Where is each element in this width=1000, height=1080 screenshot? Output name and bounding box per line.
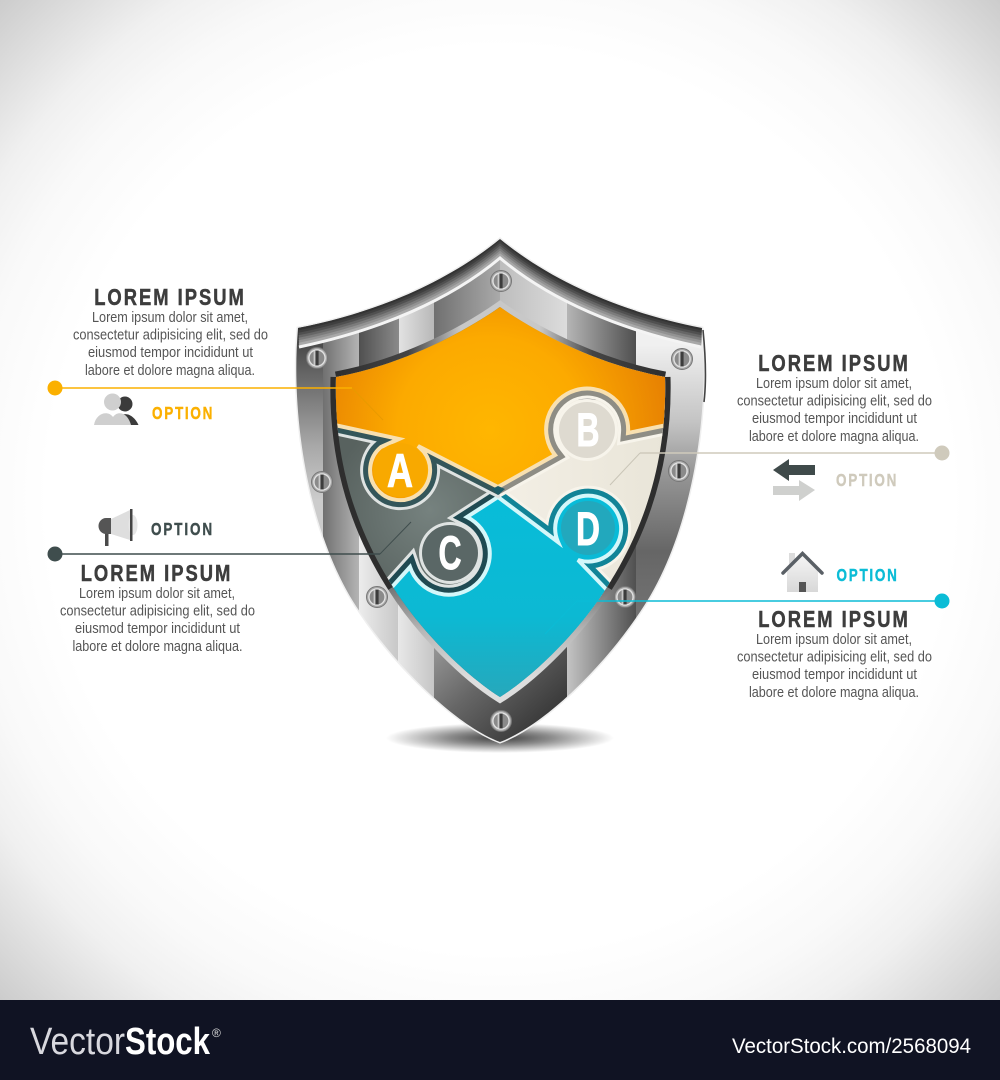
text block: top left: labore et dolore magna aliqua. (85, 362, 255, 379)
text block: top left (73, 285, 268, 379)
badge C (419, 522, 481, 584)
piece: teal (372, 496, 630, 715)
text block: top right: eiusmod tempor incididunt ut (752, 410, 918, 427)
icon: house (783, 553, 822, 592)
puzzle pieces (336, 307, 666, 697)
footer url: VectorStock.com/2568094 (732, 1035, 971, 1058)
text block: bottom right: consectetur adipisicing elit, sed do (737, 648, 932, 666)
connector: teal (545, 594, 950, 634)
text block: top right: LOREM IPSUM (758, 351, 908, 377)
text block: top right: consectetur adipisicing elit, sed do (737, 392, 932, 410)
footer logo: Stock (125, 1021, 211, 1063)
text block: bottom right: Lorem ipsum dolor sit amet, (756, 631, 912, 648)
text block: bottom left: Lorem ipsum dolor sit amet, (79, 585, 235, 602)
connector: orange (48, 380, 383, 420)
infographic canvas (0, 237, 1000, 1080)
footer logo: ® (212, 1026, 221, 1040)
text block: top right: Lorem ipsum dolor sit amet, (756, 375, 912, 392)
piece: orange (330, 300, 672, 500)
badge D (561, 501, 615, 555)
text block: bottom left: LOREM IPSUM (81, 561, 230, 587)
footer bar (0, 1000, 1000, 1080)
option label: teal: OPTION (836, 566, 897, 586)
text block: top left: consectetur adipisicing elit, sed do (73, 326, 268, 344)
connector: beige (610, 446, 950, 485)
icon: arrows (773, 459, 815, 501)
badge B: B (576, 403, 600, 456)
option label: dark: OPTION (151, 520, 212, 540)
text block: bottom left (60, 561, 255, 655)
piece: beige (509, 400, 665, 612)
connector: dark (48, 522, 411, 562)
text block: bottom left: labore et dolore magna aliqua. (72, 638, 242, 655)
text block: top left: Lorem ipsum dolor sit amet, (92, 309, 248, 326)
text block: top right (737, 351, 932, 445)
badge A: A (387, 444, 413, 497)
inner dark border (336, 307, 665, 697)
shield (290, 230, 712, 750)
option label: orange: OPTION (152, 404, 212, 424)
text block: bottom right: LOREM IPSUM (758, 607, 908, 633)
shield ground shadow (386, 723, 614, 753)
text block: top left: eiusmod tempor incididunt ut (88, 344, 254, 361)
text block: bottom left: eiusmod tempor incididunt ut (75, 620, 241, 637)
text block: top right: labore et dolore magna aliqua. (749, 428, 919, 445)
metal frame (290, 230, 712, 750)
text block: top left: LOREM IPSUM (94, 285, 244, 311)
center join (492, 486, 505, 495)
icon: people (94, 394, 138, 425)
text block: bottom right: labore et dolore magna aliqua. (749, 684, 919, 701)
text block: bottom left: consectetur adipisicing elit, sed do (60, 602, 255, 620)
text block: bottom right (737, 607, 932, 701)
icon: megaphone (99, 509, 138, 546)
badge D: D (576, 502, 600, 555)
badge B (556, 399, 618, 461)
footer logo: Vector (30, 1021, 125, 1063)
badge C: C (438, 526, 462, 579)
screws (306, 270, 692, 732)
badge A (373, 443, 427, 497)
footer logo (30, 1021, 221, 1063)
text block: bottom right: eiusmod tempor incididunt ut (752, 666, 918, 683)
piece: gray (338, 433, 486, 585)
option label: beige: OPTION (836, 471, 896, 491)
